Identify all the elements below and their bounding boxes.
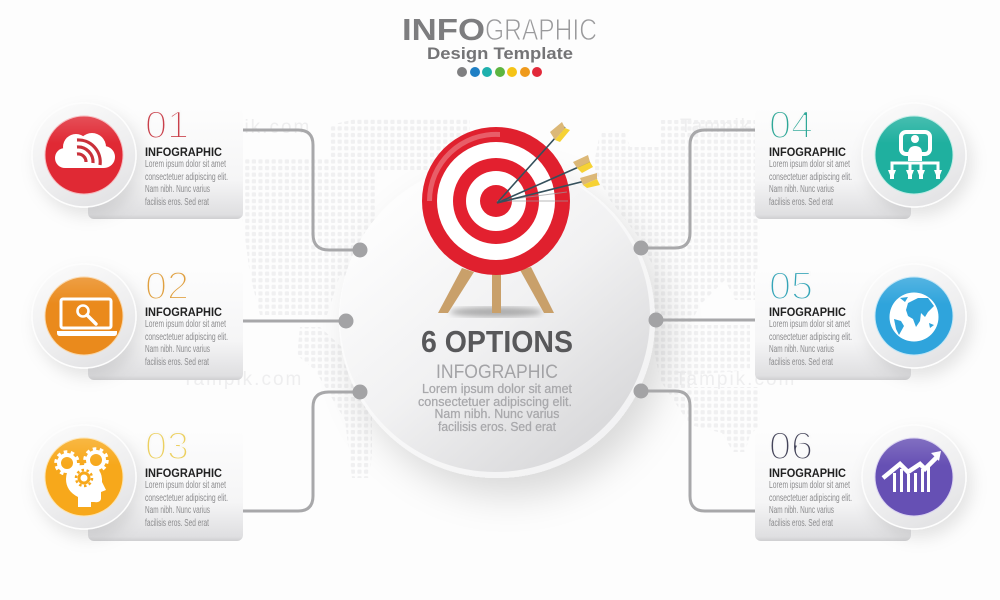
body text [145,480,228,529]
center heading: 6 OPTIONS: 6 OPTIONS [421,324,573,359]
center body text: facilisis eros. Sed erat [438,420,556,434]
card [88,269,243,380]
heading: INFOGRAPHIC [769,307,846,319]
card [88,108,243,219]
body text [145,319,228,368]
body text [769,480,852,529]
panel: option 06 [755,425,966,541]
arrows [497,122,600,203]
panel: option 03 [32,425,243,541]
body text: Nam nibh. Nunc varius [145,184,210,195]
title [402,12,597,77]
card [755,108,911,219]
body text: consectetuer adipiscing elit. [145,172,228,183]
body text: facilisis eros. Sed erat [145,357,209,368]
watermark text: Tampik.com [190,117,311,138]
body text: Nam nibh. Nunc varius [769,505,834,516]
body text: Lorem ipsum dolor sit amet [769,319,850,330]
body text: facilisis eros. Sed erat [769,197,833,208]
body text: Nam nibh. Nunc varius [145,505,210,516]
body text: Nam nibh. Nunc varius [769,344,834,355]
center body text: consectetuer adipiscing elit. [418,395,572,409]
icon: teal hierarchy with monitor [862,103,966,207]
center body text: Nam nibh. Nunc varius [434,407,560,421]
connector lines [243,130,755,511]
heading: INFOGRAPHIC [769,147,846,159]
icon: blue globe [862,264,966,368]
body text: facilisis eros. Sed erat [145,197,209,208]
body text: Nam nibh. Nunc varius [145,344,210,355]
title line: INFOGRAPHIC: INFO [402,12,485,47]
body text: consectetuer adipiscing elit. [145,493,228,504]
heading: INFOGRAPHIC [145,307,222,319]
target rings [422,127,570,275]
heading: INFOGRAPHIC [769,468,846,480]
number: 04 [769,104,813,147]
card [755,430,911,541]
body text [145,159,228,208]
center body text: Lorem ipsum dolor sit amet [422,382,573,396]
body text [769,319,852,368]
watermark text: Tampik.com [675,369,796,390]
target highlight [427,132,500,201]
connector dots [338,240,664,400]
watermark text: Tampik.com [680,116,801,137]
icon: purple rising chart [862,425,966,529]
panel: option 02 [32,264,243,380]
body text: Lorem ipsum dolor sit amet [145,319,226,330]
body text: facilisis eros. Sed erat [769,357,833,368]
body text: consectetuer adipiscing elit. [769,493,852,504]
body text: Lorem ipsum dolor sit amet [769,480,850,491]
watermark text: Tampik.com [182,369,303,390]
body text: facilisis eros. Sed erat [769,518,833,529]
heading: INFOGRAPHIC [145,468,222,480]
center body text [418,382,573,434]
heading: INFOGRAPHIC [145,147,222,159]
body text: consectetuer adipiscing elit. [145,332,228,343]
panel: option 04 [755,103,966,219]
panel: option 01 [32,103,243,219]
body text [769,159,852,208]
title line: INFOGRAPHIC: GRAPHIC [485,12,597,47]
card [755,269,911,380]
body text: Nam nibh. Nunc varius [769,184,834,195]
subtitle: Design Template: Design Template [427,44,573,63]
world map dot background [245,120,758,478]
number: 06 [769,425,813,468]
icon: red cloud with signal [32,103,136,207]
colour dots [457,67,542,77]
number: 02 [145,265,189,308]
body text: Lorem ipsum dolor sit amet [769,159,850,170]
body text: facilisis eros. Sed erat [145,518,209,529]
stand legs [438,267,554,313]
card [88,430,243,541]
panel: option 05 [755,264,966,380]
body text: consectetuer adipiscing elit. [769,172,852,183]
stand shadow [450,307,542,317]
body text: Lorem ipsum dolor sit amet [145,480,226,491]
icon: yellow head with gears [32,425,136,529]
body text: Lorem ipsum dolor sit amet [145,159,226,170]
center subheading: INFOGRAPHIC [436,361,558,383]
body text: consectetuer adipiscing elit. [769,332,852,343]
number: 05 [769,265,813,308]
number: 01 [145,104,189,147]
watermark text [182,116,801,390]
central hub circle [339,162,655,478]
icon: target with arrows on stand [422,122,600,317]
number: 03 [145,425,189,468]
icon: orange laptop with magnifier [32,264,136,368]
